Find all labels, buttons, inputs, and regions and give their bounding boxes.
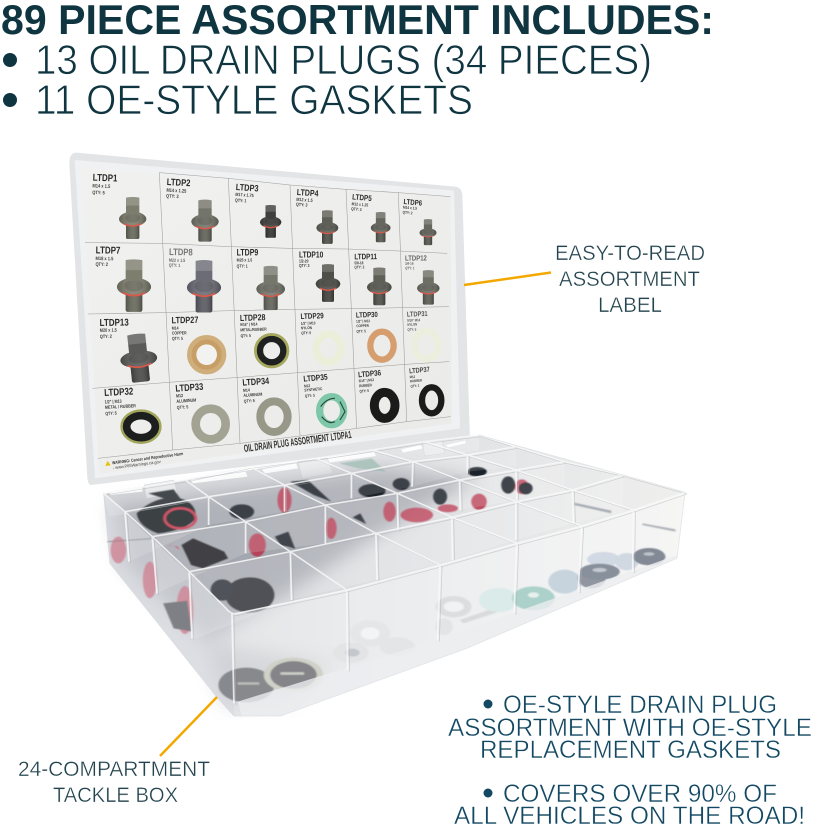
cell LTDP11 (354, 253, 392, 305)
callout: 24-compartment tackle box: TACKLE BOX (53, 783, 178, 807)
cell LTDP35: QTY: 5 (305, 393, 315, 399)
cell LTDP6: M14 x 1.5 (403, 205, 417, 211)
cell LTDP32 (104, 386, 160, 442)
cell LTDP8: LTDP8 (169, 246, 193, 258)
cell LTDP29 (300, 312, 341, 362)
cell LTDP27: COPPER (172, 330, 187, 336)
cell LTDP32: METAL / RUBBER (105, 403, 136, 410)
cell LTDP31: QTY: 5 (407, 327, 417, 332)
cell LTDP37: QTY: 1 (410, 383, 420, 389)
cell LTDP30: QTY: 5 (356, 329, 366, 334)
cell LTDP8: M22 x 1.5 (169, 257, 186, 263)
cell LTDP34: ALUMINUM (243, 391, 263, 398)
cell LTDP29: NYLON (301, 326, 312, 331)
cell LTDP11: QTY: 2 (354, 265, 364, 270)
interior shadow haze (113, 467, 479, 643)
cell LTDP37: LTDP37 (409, 366, 430, 376)
cell LTDP31: LTDP31 (407, 310, 428, 319)
cell LTDP5: M12 x 1.25 (351, 202, 368, 208)
cell LTDP34 (242, 375, 288, 432)
cell LTDP30: LTDP30 (356, 311, 378, 320)
callout: 24-compartment tackle box (18, 757, 210, 807)
cell LTDP9: LTDP9 (237, 248, 259, 258)
cell LTDP33 (175, 381, 226, 439)
cell LTDP28 (240, 312, 288, 367)
cell LTDP28: QTY: 5 (240, 334, 251, 338)
cell LTDP9: M25 x 1.5 (237, 257, 253, 263)
cell LTDP5 (351, 193, 391, 242)
cell LTDP7: QTY: 2 (95, 261, 109, 267)
cell LTDP9 (237, 248, 285, 310)
cell LTDP33: QTY: 5 (177, 404, 189, 410)
text block: vehicle coverage: COVERS OVER 90% OF (503, 780, 777, 808)
cell LTDP9: QTY: 1 (237, 263, 248, 268)
cell LTDP35: LTDP35 (303, 372, 328, 384)
cell LTDP32: LTDP32 (104, 386, 134, 398)
warning note: WARNING: Cancer and Reproductive Harm (112, 451, 184, 465)
callout: easy-to-read assortment label: LABEL (598, 293, 662, 317)
compartment contents: drain plugs (108, 458, 533, 634)
bullet list: assortment contents (3, 36, 652, 123)
cell LTDP6: QTY: 2 (402, 210, 413, 216)
cell LTDP10: QTY: 3 (299, 264, 309, 268)
cell LTDP1 (92, 172, 146, 239)
cell LTDP7 (95, 244, 151, 312)
cell LTDP1: LTDP1 (93, 172, 118, 184)
cell LTDP34: LTDP34 (242, 375, 270, 388)
cell LTDP31 (407, 310, 438, 359)
warning note (105, 451, 184, 471)
callout: easy-to-read assortment label: ASSORTMENT (559, 267, 700, 291)
cell LTDP2: M14 x 1.25 (166, 187, 187, 194)
cell LTDP28: METAL/RUBBER (240, 327, 267, 333)
cell LTDP37 (409, 366, 441, 413)
cell LTDP29: LTDP29 (300, 312, 324, 321)
cell LTDP33: M12 (176, 393, 184, 399)
cell LTDP8: QTY: 1 (169, 262, 181, 268)
cell LTDP12 (405, 255, 440, 305)
divider edges (104, 435, 687, 716)
cell LTDP32: 1/2" | M13 (104, 398, 122, 405)
cell LTDP3: M17 x 1.75 (235, 191, 254, 198)
cell LTDP3: QTY: 1 (235, 197, 247, 204)
cell LTDP27 (172, 314, 224, 372)
leader line: assortment label (464, 272, 551, 285)
cell LTDP7: M18 x 1.5 (96, 256, 114, 261)
cell LTDP36: LTDP36 (358, 369, 382, 380)
cell LTDP35: M12 (304, 384, 310, 389)
cell LTDP32: QTY: 5 (105, 410, 118, 416)
cell LTDP35: SYNTHETIC (304, 387, 323, 393)
cell LTDP6: LTDP6 (403, 198, 422, 208)
cell LTDP13: M20 x 1.5 (100, 327, 117, 333)
cell LTDP29: 1/2" | M13 (301, 321, 316, 326)
cell LTDP36: 3/16" | M12 (358, 378, 374, 383)
cell LTDP4: LTDP4 (297, 187, 319, 199)
hinge tabs (144, 440, 445, 498)
text block: vehicle coverage: ALL VEHICLES ON THE ROAD! (454, 802, 805, 830)
cell LTDP33: ALUMINUM (176, 397, 197, 404)
cell LTDP4: M12 x 1.5 (296, 196, 313, 203)
text block: OE-style drain plug assortment (448, 691, 812, 764)
text block: vehicle coverage (454, 780, 805, 830)
cell LTDP36 (358, 369, 395, 418)
cell LTDP8 (169, 246, 221, 312)
compartment walls (104, 435, 685, 716)
callout: 24-compartment tackle box: 24-COMPARTMENT (18, 757, 210, 781)
cell LTDP35 (303, 372, 345, 425)
label sheet (82, 168, 452, 474)
callout: easy-to-read assortment label: EASY-TO-READ (555, 241, 705, 265)
cell LTDP37: RUBBER (410, 378, 423, 384)
cell LTDP7: LTDP7 (96, 244, 121, 256)
cell LTDP10: 1/2-20 (299, 259, 308, 264)
cell LTDP4 (296, 187, 338, 244)
cell LTDP27: M14 (172, 325, 179, 331)
bullet list: assortment contents: 11 OE-STYLE GASKETS (35, 76, 473, 123)
warning note: - www.P65Warnings.ca.gov (112, 459, 162, 470)
compartment contents: gaskets (218, 503, 675, 702)
cell LTDP6 (402, 198, 436, 245)
cell LTDP11: 5/8-18 (354, 261, 363, 265)
cell LTDP5: LTDP5 (352, 193, 372, 203)
tackle box base with compartments (104, 435, 687, 716)
cell LTDP12: 3/4-16 (405, 261, 414, 266)
text block: OE-style drain plug assortment: OE-STYLE DRAIN PLUG (503, 691, 777, 719)
cell LTDP13: QTY: 2 (100, 333, 112, 339)
cell LTDP27: LTDP27 (172, 314, 199, 326)
leader line: tackle box (160, 697, 217, 756)
cell LTDP2: QTY: 3 (166, 193, 179, 199)
cell LTDP13: LTDP13 (100, 317, 129, 328)
cell LTDP36: RUBBER (359, 383, 372, 388)
cell LTDP34: QTY: 5 (244, 397, 256, 404)
cell LTDP2: LTDP2 (167, 176, 191, 188)
cell LTDP27: QTY: 5 (172, 335, 184, 341)
cell LTDP3: LTDP3 (236, 181, 259, 194)
cell LTDP34: M14 (243, 387, 251, 393)
cell LTDP33: LTDP33 (175, 381, 204, 394)
cell LTDP1: M14 x 1.5 (92, 183, 111, 189)
text block: OE-style drain plug assortment: REPLACEMENT GASKETS (480, 736, 781, 764)
cell LTDP30 (356, 311, 394, 360)
cell LTDP12: LTDP12 (405, 255, 427, 263)
label caption: OIL DRAIN PLUG ASSORTMENT LTDPA1 (243, 429, 353, 455)
cell LTDP10 (299, 250, 340, 302)
cell LTDP2 (166, 176, 219, 242)
cell LTDP13 (100, 317, 159, 384)
cell LTDP28: LTDP28 (240, 312, 266, 323)
cell LTDP10: LTDP10 (299, 250, 323, 260)
bullet list: assortment contents: 13 OIL DRAIN PLUGS (34 PIECES) (35, 36, 652, 83)
tackle box lid with assortment label (69, 153, 470, 485)
cell LTDP37: M12 (409, 375, 416, 379)
cell LTDP4: QTY: 3 (296, 201, 308, 208)
callout: easy-to-read assortment label (555, 241, 705, 317)
cell LTDP31: NYLON (407, 322, 418, 327)
cell LTDP30: COPPER (356, 323, 369, 328)
cell LTDP36: QTY: 5 (359, 389, 369, 394)
cell LTDP1: QTY: 5 (92, 190, 105, 196)
cell LTDP3 (235, 181, 281, 238)
cell LTDP11: LTDP11 (354, 253, 377, 262)
cell LTDP30: 1/2" | M13 (356, 319, 370, 324)
cell LTDP5: QTY: 3 (351, 207, 362, 212)
hinge gaps (110, 441, 465, 495)
cell LTDP12: QTY: 1 (405, 266, 415, 271)
cell LTDP29: QTY: 5 (301, 331, 311, 336)
cell LTDP28: 9/16" | M14 (240, 322, 258, 327)
text block: OE-style drain plug assortment: ASSORTMENT WITH OE-STYLE (448, 714, 812, 742)
cell LTDP31: 9/16" M14 (407, 318, 420, 323)
